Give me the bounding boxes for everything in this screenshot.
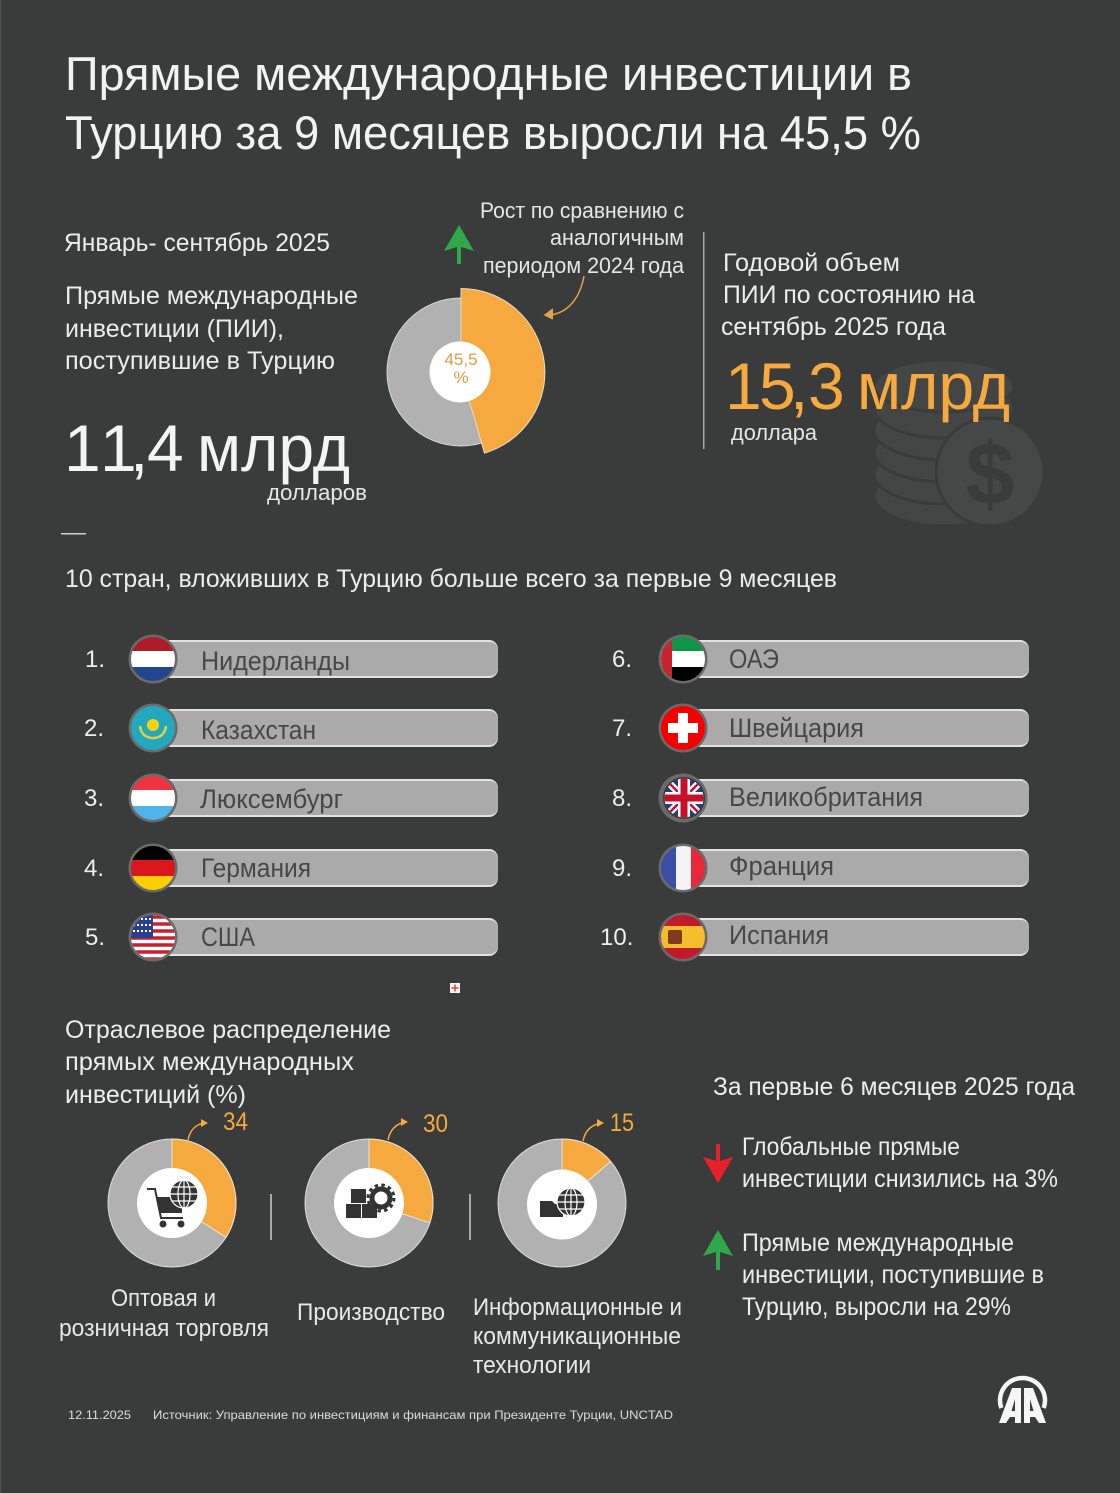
Turkey FDI text: Прямые международные — [742, 1229, 1014, 1257]
panel: countries 6-10 — [600, 634, 1029, 962]
value 30: 30 — [423, 1110, 448, 1138]
row 6: UAE — [612, 634, 1029, 684]
row 6: UAE: ОАЭ — [729, 644, 779, 674]
annual value: доллара — [731, 420, 818, 445]
row 4: Germany: Германия — [201, 853, 311, 883]
Turkey FDI text: Турцию, выросли на 29% — [742, 1293, 1011, 1321]
title — [65, 47, 921, 159]
row 9: France: Франция — [729, 851, 834, 881]
heading: За первые 6 месяцев 2025 года — [713, 1073, 1075, 1101]
row 7: Switzerland: Швейцария — [729, 713, 864, 743]
sector labels: Производство — [297, 1299, 445, 1326]
Turkey FDI text — [742, 1229, 1044, 1321]
period label: Январь- сентябрь 2025 — [64, 229, 330, 257]
heading: sector distribution — [65, 1016, 391, 1109]
panel: annual FDI — [721, 249, 1010, 445]
small marker — [450, 983, 460, 993]
FDI value: 11,4 — [64, 411, 184, 485]
FDI description: инвестиции (ПИИ), — [65, 315, 284, 343]
annual value: 15,3 — [725, 349, 845, 423]
row 1: Netherlands — [85, 634, 498, 684]
heading: sector distribution: прямых международных — [65, 1048, 354, 1076]
annual description: сентябрь 2025 года — [721, 313, 946, 341]
Turkey FDI text: инвестиции, поступившие в — [742, 1261, 1044, 1289]
growth note — [480, 198, 685, 278]
growth note: аналогичным — [550, 225, 684, 250]
sector labels: коммуникационные — [473, 1323, 681, 1350]
row 7: Switzerland — [612, 704, 1029, 752]
FDI value — [64, 411, 367, 505]
FDI value: долларов — [267, 480, 367, 505]
growth note: Рост по сравнению с — [480, 198, 684, 223]
row 2: Kazakhstan — [84, 704, 498, 752]
row 1: Netherlands: 1. — [85, 646, 105, 673]
row 5: USA — [85, 912, 498, 962]
icon: folder and globe — [540, 1188, 585, 1217]
panel: incoming FDI — [64, 229, 367, 505]
sector labels: Оптовая и — [111, 1285, 216, 1312]
pie chart: 45.5% — [387, 288, 545, 453]
value 15 — [583, 1109, 634, 1141]
row 2: Kazakhstan: 2. — [84, 715, 104, 742]
sector labels: Информационные и — [473, 1294, 682, 1321]
FDI value: млрд — [197, 411, 350, 485]
sector labels: розничная торговля — [59, 1315, 269, 1342]
global FDI text — [742, 1133, 1058, 1193]
row 5: USA: 5. — [85, 924, 105, 951]
row 5: USA: США — [201, 922, 255, 952]
heading: top 10 countries: 10 стран, вложивших в Турцию больше всего за первые 9 месяцев — [65, 565, 837, 593]
annual value: млрд — [857, 349, 1010, 423]
FDI description: поступившие в Турцию — [65, 347, 335, 375]
footer: date and source: Источник: Управление по инвестициям и финансам при Президенте Турции, UNCTAD — [153, 1408, 673, 1422]
icon: green up arrow — [444, 225, 474, 264]
divider line — [703, 232, 704, 449]
row 10: Spain: Испания — [729, 920, 829, 950]
footer: date and source: 12.11.2025 — [68, 1408, 131, 1422]
sector labels — [59, 1285, 682, 1379]
row 9: France — [612, 844, 1029, 892]
row 3: Luxembourg: 3. — [84, 785, 104, 812]
divider — [270, 1194, 272, 1240]
arrow: note to pie — [545, 276, 584, 319]
value 15: 15 — [610, 1109, 634, 1137]
short divider — [61, 533, 86, 534]
row 8: United Kingdom: 8. — [612, 785, 632, 812]
row 10: Spain — [600, 912, 1029, 962]
row 6: UAE: 6. — [612, 646, 632, 673]
icon: cart and globe — [147, 1180, 198, 1228]
title: Турцию за 9 месяцев выросли на 45,5 % — [65, 106, 921, 159]
sector labels: технологии — [473, 1352, 591, 1379]
growth note: периодом 2024 года — [483, 253, 685, 278]
icon: coins: $ — [966, 424, 1014, 523]
annual description: ПИИ по состоянию на — [723, 281, 975, 309]
chart: wholesale and retail 34 — [108, 1108, 248, 1267]
icon: green up arrow — [703, 1230, 733, 1270]
row 9: France: 9. — [612, 855, 632, 882]
global FDI text: Глобальные прямые — [742, 1133, 960, 1161]
row 8: United Kingdom — [612, 774, 1029, 822]
heading: sector distribution: инвестиций (%) — [65, 1081, 246, 1109]
pie chart: 45.5%: % — [453, 368, 469, 387]
chart: manufacturing 30 — [305, 1110, 448, 1267]
value 34 — [188, 1108, 248, 1140]
heading: sector distribution: Отраслевое распределение — [65, 1016, 391, 1044]
logo: AA — [999, 1378, 1046, 1423]
row 4: Germany: 4. — [84, 855, 104, 882]
icon: boxes and gear — [346, 1185, 394, 1218]
row 8: United Kingdom: Великобритания — [729, 782, 923, 812]
global FDI text: инвестиции снизились на 3% — [742, 1165, 1058, 1193]
pie chart: 45.5%: 45,5 — [444, 350, 478, 369]
annual description: Годовой объем — [723, 249, 900, 277]
icon: red down arrow — [703, 1144, 733, 1183]
row 7: Switzerland: 7. — [612, 715, 632, 742]
row 3: Luxembourg — [84, 774, 498, 822]
panel: countries 1-5 — [84, 634, 498, 962]
panel: first six months — [703, 1073, 1075, 1321]
row 10: Spain: 10. — [600, 924, 633, 951]
FDI description — [65, 282, 358, 375]
row 4: Germany — [84, 844, 498, 892]
row 3: Luxembourg: Люксембург — [200, 784, 343, 814]
title: Прямые международные инвестиции в — [65, 47, 912, 100]
annual value — [725, 349, 1010, 445]
row 1: Netherlands: Нидерланды — [201, 646, 350, 676]
divider — [469, 1194, 471, 1240]
icon: coins — [874, 360, 1044, 526]
value 34: 34 — [223, 1108, 248, 1136]
value 30 — [388, 1110, 448, 1140]
row 2: Kazakhstan: Казахстан — [201, 715, 316, 745]
annual description — [721, 249, 975, 341]
FDI description: Прямые международные — [65, 282, 358, 310]
chart: ICT 15 — [498, 1109, 634, 1267]
